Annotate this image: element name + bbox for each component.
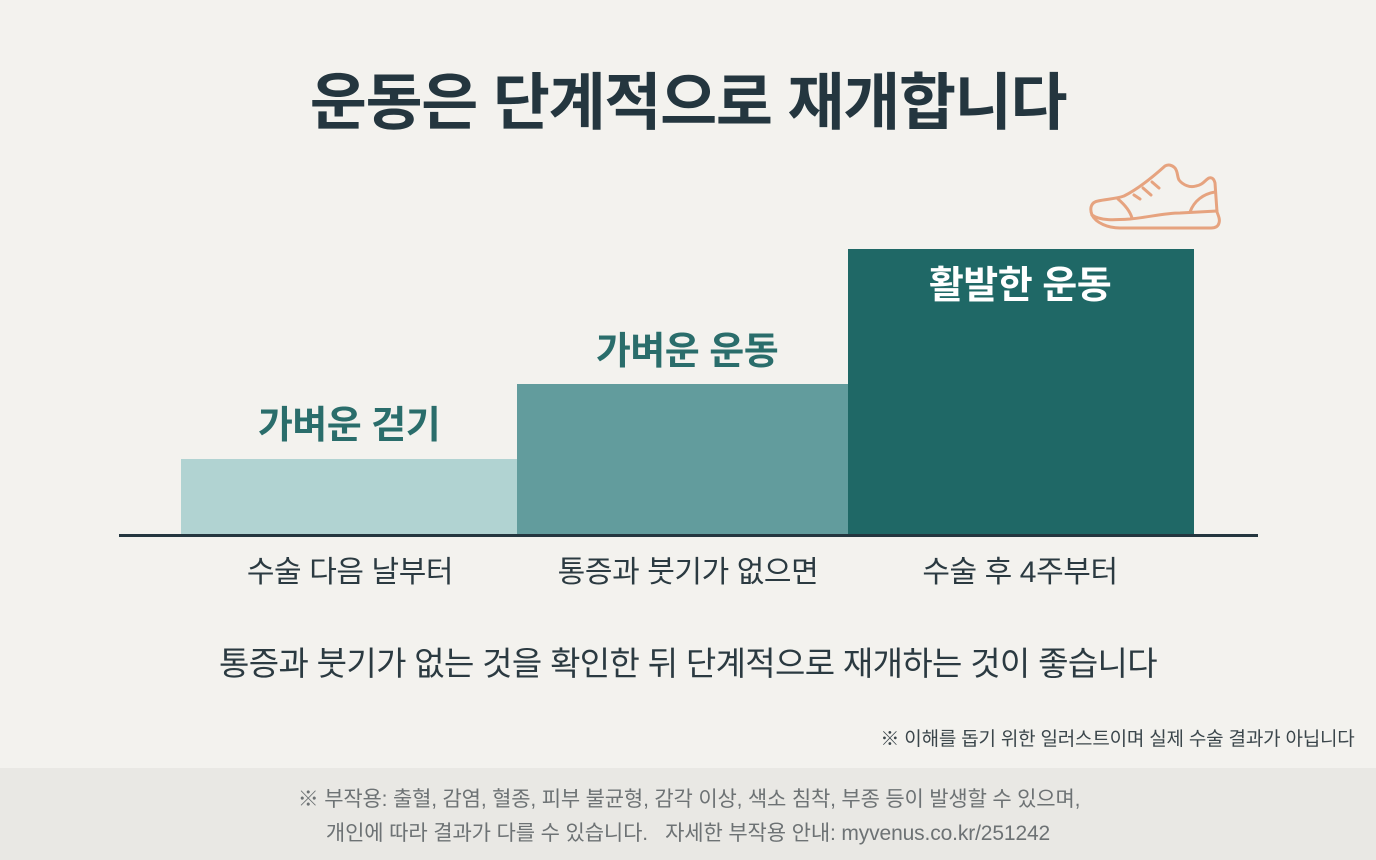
step 2 bar: [517, 384, 848, 535]
step 1 label: 가벼운 걷기: [258, 405, 440, 447]
step 2 label: 가벼운 운동: [596, 331, 778, 373]
step 2 timing: 통증과 붓기가 없으면: [558, 556, 818, 589]
footer band: [0, 768, 1376, 860]
side effects line 2: 개인에 따라 결과가 다를 수 있습니다. 자세한 부작용 안내: myvenus.co.kr/251242: [326, 822, 1050, 845]
step 3 timing: 수술 후 4주부터: [922, 556, 1118, 589]
step 3 label: 활발한 운동: [929, 265, 1111, 307]
summary text: 통증과 붓기가 없는 것을 확인한 뒤 단계적으로 재개하는 것이 좋습니다: [219, 645, 1157, 682]
step 1 bar: [181, 459, 517, 535]
step 3 bar: [848, 249, 1194, 535]
illustration note: ※ 이해를 돕기 위한 일러스트이며 실제 수술 결과가 아닙니다: [880, 729, 1355, 750]
step 1 timing: 수술 다음 날부터: [247, 556, 453, 589]
side effects line 1: ※ 부작용: 출혈, 감염, 혈종, 피부 불균형, 감각 이상, 색소 침착, 부종 등이 발생할 수 있으며,: [298, 788, 1080, 811]
baseline: [119, 534, 1258, 537]
title: 운동은 단계적으로 재개합니다: [310, 69, 1066, 138]
icon: running shoe: [1089, 164, 1221, 230]
